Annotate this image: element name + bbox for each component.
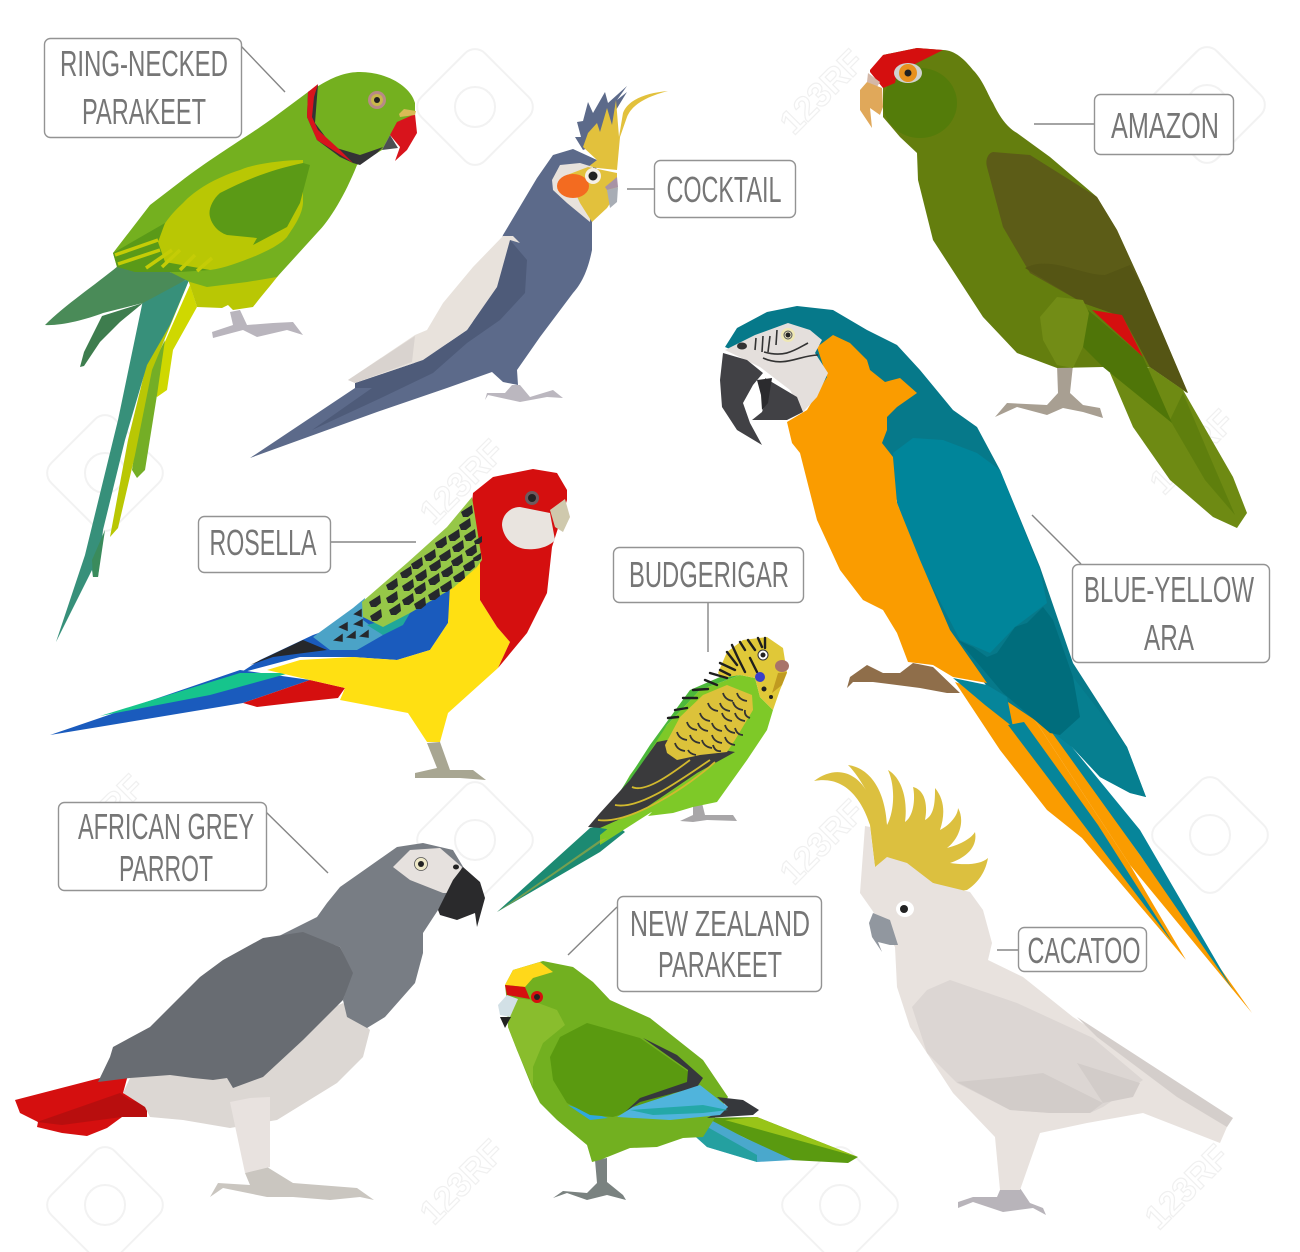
watermark pattern: 123RF [413, 1133, 512, 1232]
watermark pattern: 123RF [53, 768, 152, 867]
watermark pattern: 123RF [1138, 1138, 1237, 1237]
bird: blue-yellow ara [720, 306, 1252, 1013]
label: cocktail: COCKTAIL [666, 169, 782, 210]
watermark pattern: 123RF [1143, 403, 1242, 502]
label: ring-necked parakeet [44, 38, 285, 138]
label: blue-yellow ara [1032, 515, 1270, 662]
label: rosella: ROSELLA [210, 522, 316, 563]
bird: budgerigar [497, 637, 789, 912]
label: rosella [198, 516, 416, 572]
label: cocktail [627, 160, 796, 218]
label: blue-yellow ara: ARA [1144, 617, 1194, 658]
label: african grey parrot [58, 802, 328, 890]
label: amazon [1034, 94, 1234, 154]
label: cacatoo: CACATOO [1028, 930, 1140, 971]
watermark pattern: 123RF [413, 433, 512, 532]
label: cacatoo [997, 928, 1146, 972]
label: ring-necked parakeet: RING-NECKED [60, 43, 228, 84]
watermark pattern: 123RF [773, 43, 872, 142]
label: ring-necked parakeet: PARAKEET [82, 91, 206, 132]
label: new zealand parakeet [568, 896, 822, 992]
bird: new zealand parakeet [498, 961, 858, 1200]
label: budgerigar [614, 548, 804, 652]
bird: rosella [50, 469, 570, 780]
label: new zealand parakeet: NEW ZEALAND [630, 903, 810, 944]
label: african grey parrot: PARROT [119, 848, 213, 889]
bird: cockatiel [250, 86, 668, 458]
watermark pattern: 123RF [773, 793, 872, 892]
label: african grey parrot: AFRICAN GREY [78, 806, 254, 847]
bird: amazon [860, 48, 1247, 528]
bird: african grey parrot [15, 843, 485, 1200]
label: new zealand parakeet: PARAKEET [658, 944, 782, 985]
bird: cacatoo [814, 765, 1233, 1215]
label: amazon: AMAZON [1111, 105, 1219, 146]
bird: ring-necked parakeet [45, 72, 417, 642]
label: budgerigar: BUDGERIGAR [629, 554, 789, 595]
